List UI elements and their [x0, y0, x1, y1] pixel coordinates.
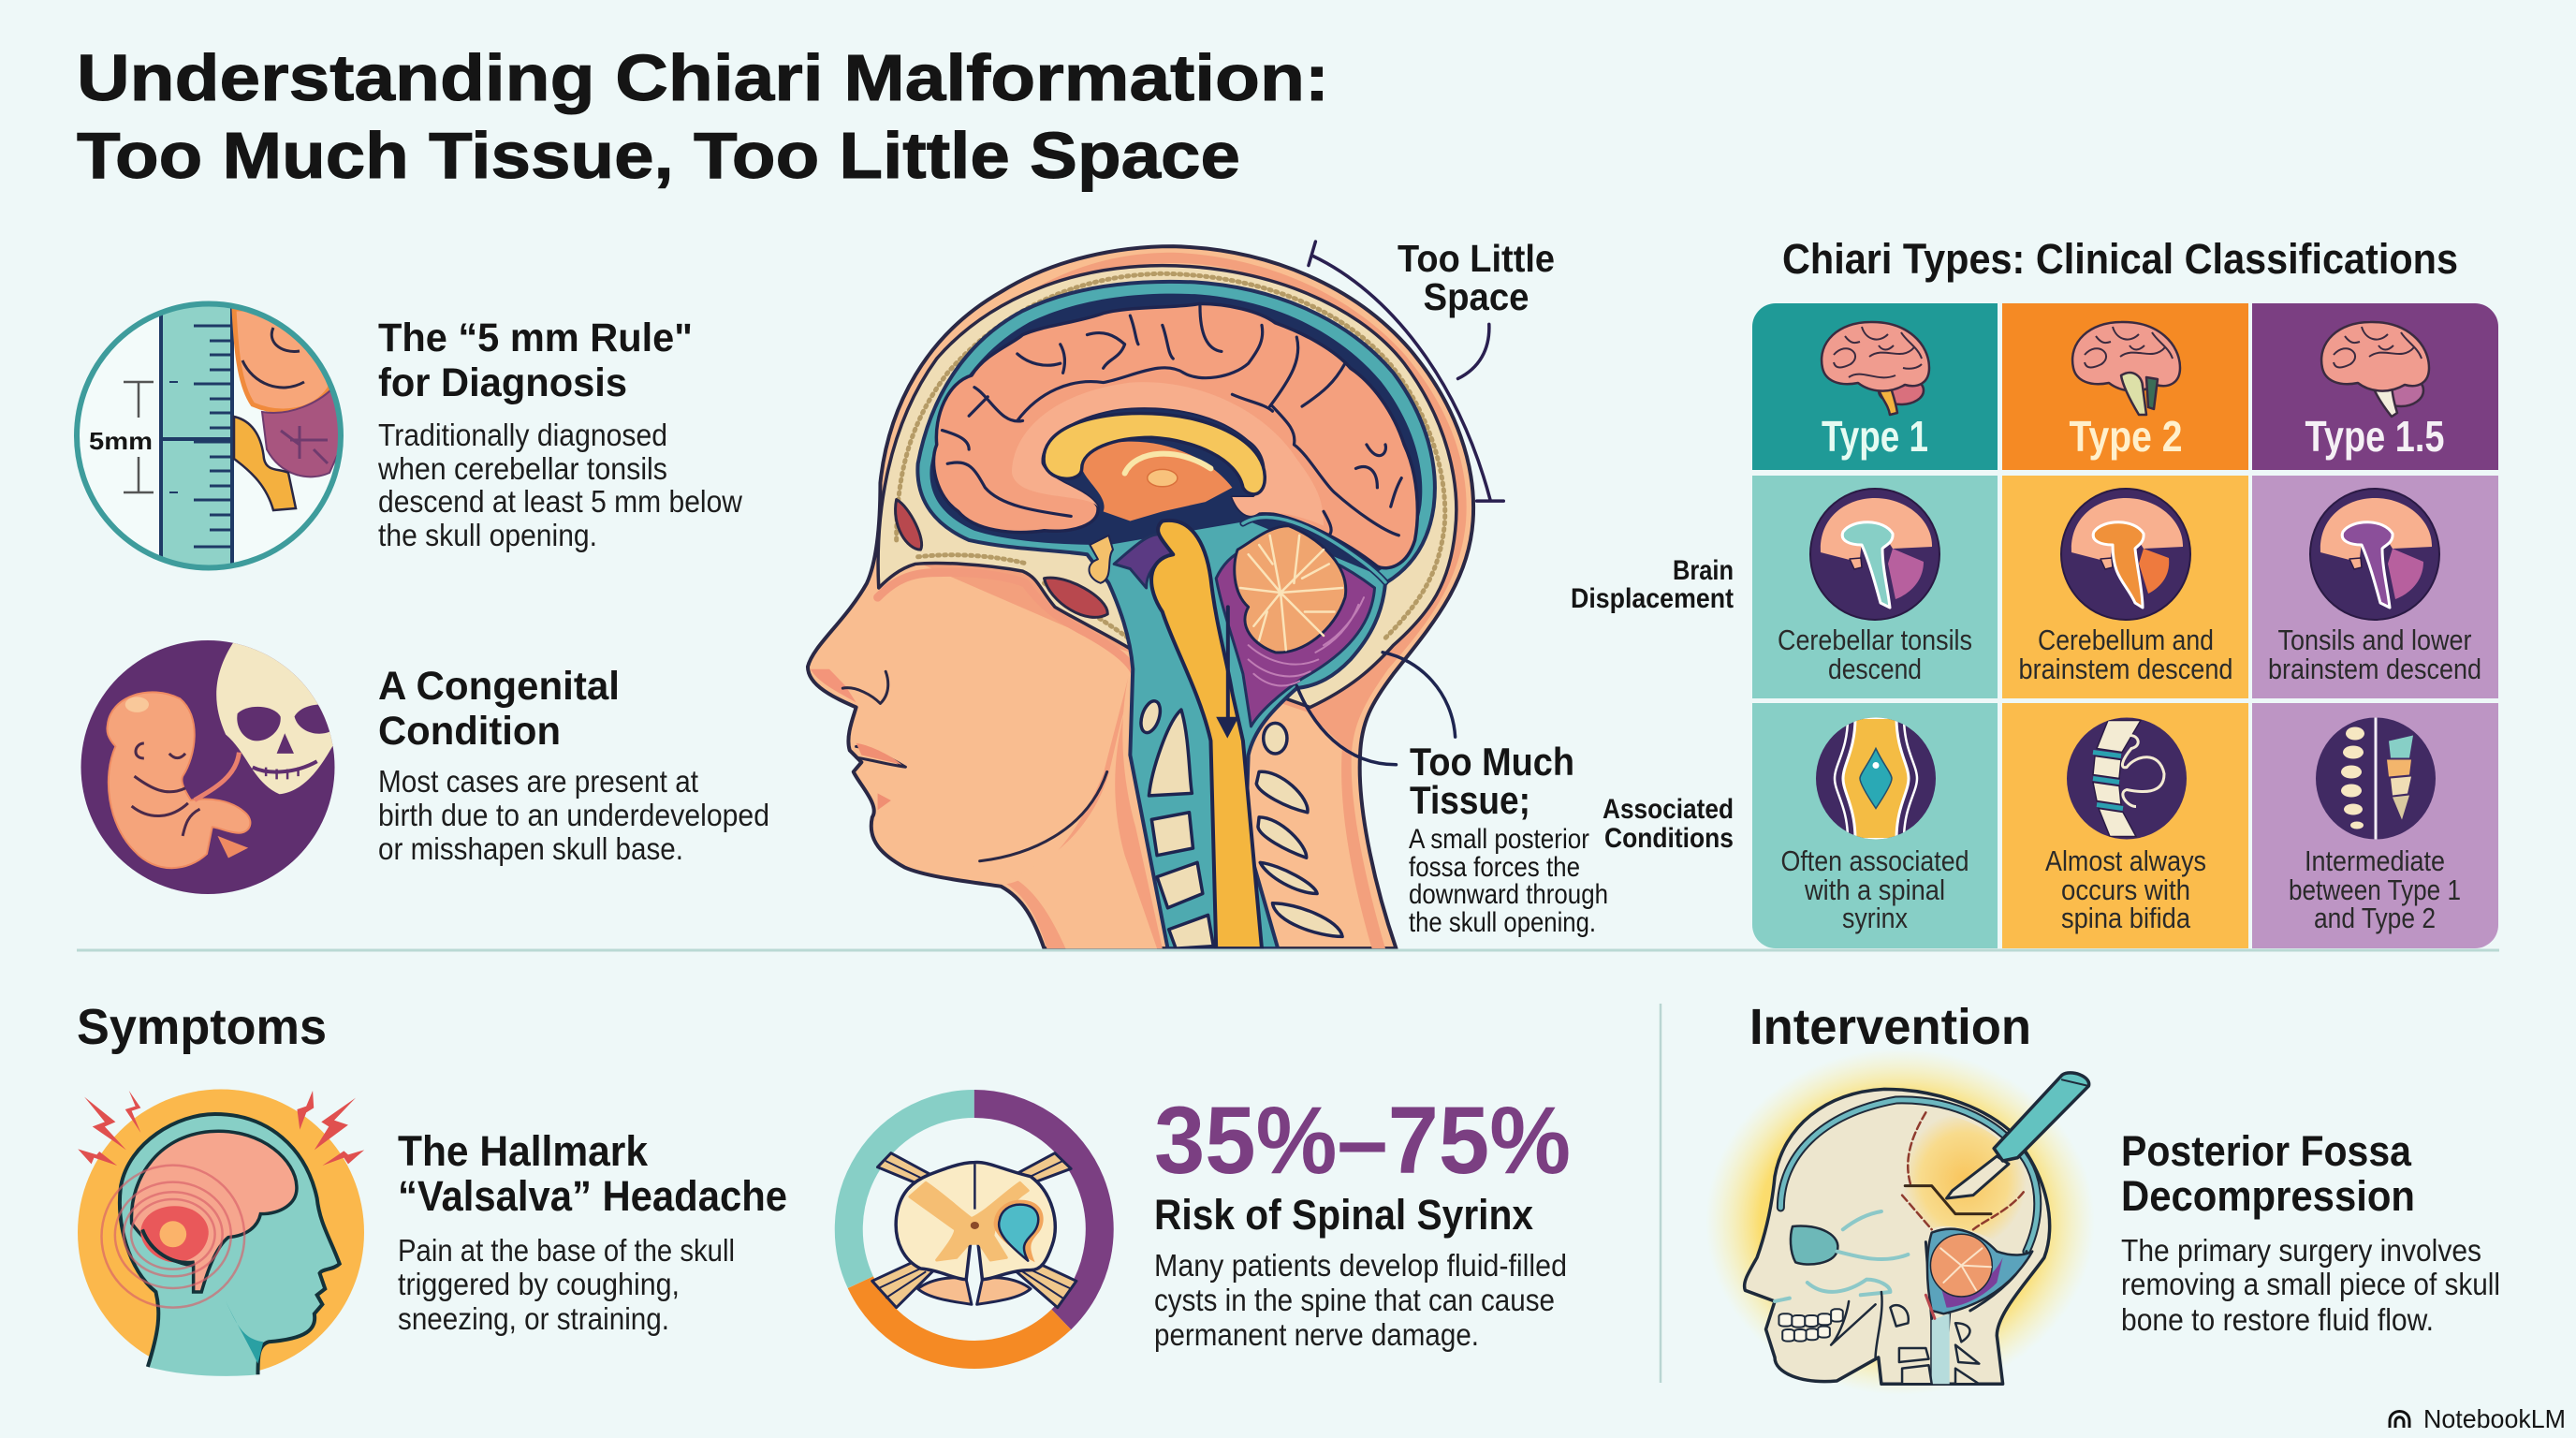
panel: congenital condition: [80, 633, 769, 894]
sinus cavities: [896, 500, 922, 550]
icon: ruler and tonsils: [77, 300, 356, 571]
icon: type 2 brain: [2072, 322, 2180, 415]
callout: too much tissue: downward through: [1409, 879, 1608, 910]
cranial cavity and spinal canal: [917, 282, 1435, 948]
labels: type headers: Type 1: [1822, 412, 1928, 461]
text: decompression description: [2121, 1233, 2500, 1337]
navy subarachnoid space: [929, 294, 1422, 574]
text: syrinx description: Many patients develop fluid-filled: [1154, 1248, 1567, 1283]
icon: headache: [78, 1090, 364, 1376]
text: displacement descriptions: Cerebellar tonsils: [1778, 624, 1972, 656]
icon: embryo and skull: [80, 633, 344, 894]
illustration: head cross-section: [808, 242, 1503, 948]
heading: 5 mm rule: The “5 mm Rule": [378, 315, 693, 360]
lightning bolts: [78, 1091, 364, 1166]
callout: too much tissue: Too Much: [1410, 740, 1574, 784]
opened bone area: [1902, 1112, 2027, 1248]
callout: too little space: Too Little: [1398, 237, 1555, 280]
text: congenital description: birth due to an underdeveloped: [378, 798, 769, 832]
eye socket: [1791, 1225, 1837, 1265]
vertebrae and canal: [1925, 1242, 2027, 1384]
skull teal band: [1780, 1100, 2038, 1252]
text: decompression description: The primary surgery involves: [2121, 1233, 2481, 1268]
head outline: [120, 1114, 340, 1374]
text: displacement descriptions: brainstem descend: [2268, 653, 2481, 685]
fornix: [1125, 454, 1210, 474]
nose shading: [811, 669, 856, 702]
text: displacement descriptions: descend: [1828, 653, 1922, 685]
callout: too much tissue: A small posterior: [1409, 824, 1589, 855]
icon: type 1.5 displacement: [2310, 489, 2439, 620]
text: 5 mm rule description: Traditionally diagnosed: [378, 418, 667, 452]
leader: too little space bracket: [1309, 242, 1503, 501]
icon: type 1.5 brain: [2321, 322, 2429, 417]
text: displacement descriptions: [1778, 624, 2481, 685]
icon: skull with surgical tool: [1705, 1049, 2095, 1395]
text: congenital description: or misshapen skull base.: [378, 831, 683, 866]
text: headache description: Pain at the base of the skull: [398, 1233, 735, 1268]
leader: too much tissue: [1296, 653, 1456, 765]
text: syrinx description: permanent nerve damage.: [1154, 1317, 1479, 1352]
heading: 5 mm rule: for Diagnosis: [378, 360, 627, 405]
cerebrum: [933, 303, 1417, 568]
callout: too much tissue: the skull opening.: [1409, 907, 1596, 938]
row labels: Brain: [1673, 555, 1734, 586]
icon: type 1 displacement: [1810, 489, 1939, 620]
title: [77, 41, 1329, 192]
cerebrum inner band: [1012, 382, 1324, 526]
heading: valsalva headache: “Valsalva” Headache: [398, 1172, 787, 1220]
skull outline: [1745, 1089, 2050, 1384]
icon: spinal syrinx: [1816, 717, 1936, 839]
brain folds: [942, 306, 1401, 536]
heading: posterior fossa decompression: [2121, 1127, 2415, 1220]
heading: Chiari types: Chiari Types: Clinical Classifications: [1782, 235, 2458, 283]
text: headache description: [398, 1233, 735, 1336]
pain focus: [140, 1206, 209, 1262]
neck and jaw shading: [1006, 669, 1163, 948]
text: headache description: triggered by coughing,: [398, 1267, 680, 1301]
callout: too much tissue: [1409, 740, 1608, 938]
sphenoid purple: [1114, 535, 1173, 588]
heading: congenital condition: Condition: [378, 709, 561, 754]
surgical tool: [1947, 1156, 2009, 1198]
heading: intervention: Intervention: [1749, 999, 2031, 1055]
text: 5 mm rule description: the skull opening.: [378, 518, 597, 552]
text: congenital description: Most cases are present at: [378, 764, 698, 799]
text: associated conditions: spina bifida: [2061, 902, 2191, 934]
row labels: Conditions: [1604, 823, 1734, 854]
row labels: [1571, 555, 1734, 854]
heading: posterior fossa decompression: Posterior Fossa: [2121, 1127, 2412, 1175]
heading: 5 mm rule: [378, 315, 693, 405]
labels: type headers: Type 2: [2069, 412, 2183, 461]
logo: NotebookLM: NotebookLM: [2423, 1404, 2566, 1433]
purple cerebellum base: [1216, 545, 1375, 726]
title: Too Much Tissue, Too Little Space: [77, 119, 1240, 192]
icon: spinal cord cross-section: [872, 1153, 1076, 1308]
face details: [842, 671, 1107, 861]
text: displacement descriptions: brainstem descend: [2018, 653, 2233, 685]
heading: posterior fossa decompression: Decompression: [2121, 1172, 2415, 1220]
text: associated conditions: between Type 1: [2289, 873, 2461, 906]
text: 5 mm rule description: when cerebellar tonsils: [377, 451, 667, 486]
icon: spina bifida: [2067, 717, 2187, 839]
pain ripples: [101, 1166, 244, 1308]
text: associated conditions: [1780, 844, 2461, 934]
icon: type 1 brain: [1822, 322, 1929, 415]
heading: valsalva headache: The Hallmark: [398, 1127, 649, 1175]
scalp band: [888, 253, 1467, 948]
callout: too much tissue: Tissue;: [1410, 778, 1530, 822]
text: associated conditions: and Type 2: [2314, 902, 2436, 934]
text: 5 mm rule description: descend at least 5 mm below: [378, 484, 742, 519]
text: decompression description: removing a small piece of skull: [2121, 1267, 2500, 1301]
shading beneath skull base: [878, 572, 1135, 674]
thalamus: [1082, 442, 1232, 521]
table: Chiari classifications: [1752, 303, 2498, 948]
labels: type headers: [1822, 412, 2445, 461]
heading: symptoms: Symptoms: [77, 999, 327, 1055]
row labels: Displacement: [1571, 583, 1734, 614]
text: syrinx description: cysts in the spine that can cause: [1154, 1283, 1555, 1317]
brain: [131, 1131, 297, 1292]
callout: too little space: [1398, 237, 1555, 318]
panel: 5 mm rule: [77, 300, 742, 571]
stat: 35%–75%: 35%–75%: [1154, 1087, 1571, 1194]
heading: congenital condition: A Congenital: [378, 664, 620, 709]
icon: intermediate spine: [2316, 717, 2436, 839]
cut line: [1902, 1112, 2024, 1229]
labels: type headers: Type 1.5: [2305, 412, 2445, 461]
skull: [878, 266, 1456, 708]
jaw: [1831, 1292, 1882, 1357]
text: 5 mm rule description: [377, 418, 742, 552]
text: associated conditions: syrinx: [1842, 902, 1908, 934]
callout: too much tissue: fossa forces the: [1409, 852, 1580, 883]
tentorium: [1243, 517, 1385, 582]
head silhouette: [808, 246, 1473, 948]
text: congenital description: [378, 764, 769, 866]
text: associated conditions: with a spinal: [1804, 873, 1945, 906]
icon: type 2 displacement: [2061, 489, 2190, 620]
vertebrae: [1137, 699, 1342, 948]
cell backgrounds: [1752, 303, 2498, 948]
head fill: [120, 1114, 340, 1376]
text: associated conditions: occurs with: [2061, 873, 2190, 906]
row labels: Associated: [1603, 794, 1734, 825]
chart: syrinx risk ring: [849, 1104, 1100, 1355]
text: syrinx description: [1154, 1248, 1567, 1352]
text: associated conditions: Almost always: [2045, 844, 2206, 877]
text: headache description: sneezing, or straining.: [398, 1301, 669, 1336]
tissue arrow: [1216, 607, 1238, 739]
text: associated conditions: Intermediate: [2305, 844, 2445, 877]
text: displacement descriptions: Tonsils and lower: [2278, 624, 2471, 656]
text: associated conditions: Often associated: [1780, 844, 1969, 877]
text: displacement descriptions: Cerebellum and: [2038, 624, 2214, 656]
cerebellum pocket: [1927, 1229, 2032, 1313]
label: 5mm: 5mm: [89, 427, 153, 455]
title: Understanding Chiari Malformation:: [77, 41, 1329, 114]
brainstem and spinal cord: [1151, 521, 1262, 948]
heading: valsalva headache: [398, 1127, 787, 1220]
heading: congenital condition: [378, 664, 620, 754]
cerebellum: [1235, 526, 1346, 653]
heading: risk of spinal syrinx: Risk of Spinal Syrinx: [1154, 1191, 1533, 1239]
teeth: [1778, 1309, 1843, 1342]
corpus callosum: [1044, 414, 1265, 494]
text: decompression description: bone to restore fluid flow.: [2121, 1302, 2434, 1337]
callout: too little space: Space: [1423, 275, 1530, 318]
